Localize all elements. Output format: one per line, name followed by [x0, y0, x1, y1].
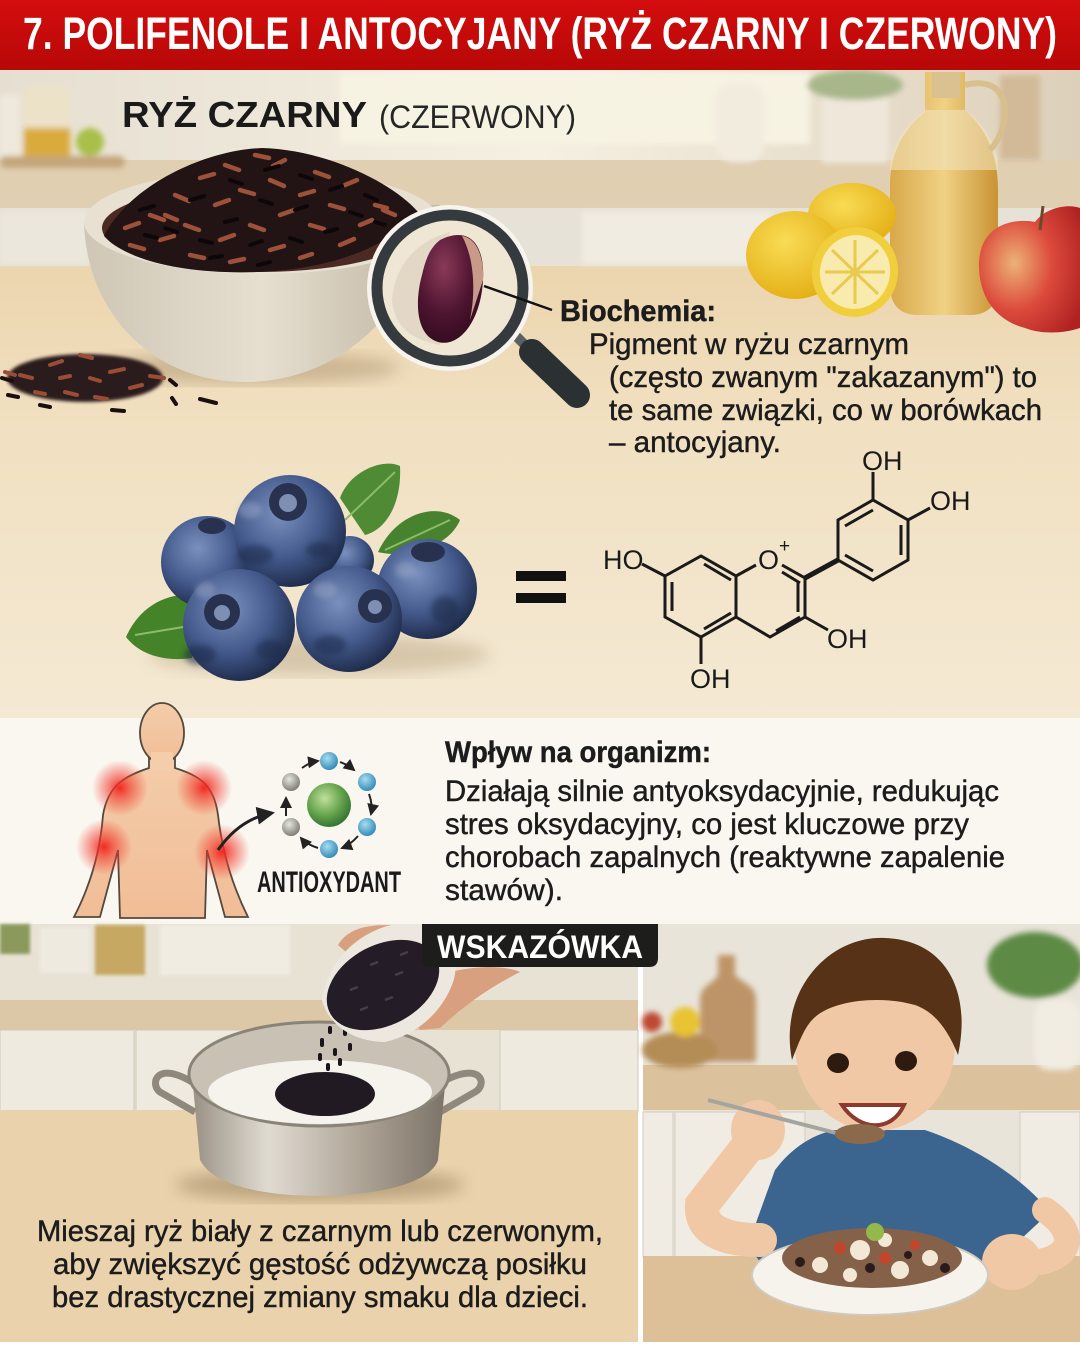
illustration: lemons, oil bottle, apple: [746, 72, 1080, 332]
text block: biochemistry: – antocyjany.: [609, 426, 781, 459]
panel: effect on the body: [0, 703, 1080, 924]
text block: effect on body: chorobach zapalnych (reaktywne zapalenie: [445, 841, 1005, 874]
text block: biochemistry: [560, 295, 1042, 459]
illustration: plate of rice: [752, 1223, 988, 1315]
text block: effect on body: stres oksydacyjny, co jest kluczowe przy: [445, 808, 969, 841]
illustration: hand pouring rice: [311, 922, 520, 1048]
text block: biochemistry: te same związki, co w borówkach: [609, 394, 1042, 427]
heading: rice: (CZERWONY): [379, 99, 576, 135]
chemical structure: anthocyanin: O: [758, 545, 779, 575]
text block: effect on body: Działają silnie antyoksydacyjnie, redukując: [445, 775, 999, 808]
illustration: child: [702, 938, 1067, 1290]
pointer line: [484, 286, 552, 310]
panel: kitchen background: [0, 68, 1080, 718]
text block: tip: [37, 1215, 603, 1314]
illustration: pot with rice: [155, 1022, 481, 1196]
chemical structure: anthocyanin: OH: [690, 664, 730, 694]
text block: effect on body: stawów).: [445, 874, 563, 907]
text block: tip: bez drastycznej zmiany smaku dla dzieci.: [52, 1281, 588, 1314]
equals sign: [516, 571, 566, 603]
illustration: blueberries: [126, 464, 490, 681]
text block: tip: aby zwiększyć gęstość odżywczą posiłku: [53, 1248, 587, 1281]
chemical structure: anthocyanin: OH: [827, 624, 868, 654]
bottom white strip: [0, 1342, 1080, 1350]
text block: biochemistry: (często zwanym "zakazanym") to: [609, 361, 1037, 394]
panel: child eating: [642, 924, 1080, 1342]
illustration: bowl of rice: [84, 148, 440, 384]
illustration: human body with inflammation: [74, 703, 272, 918]
heading: rice: RYŻ CZARNY: [122, 94, 367, 135]
icon: rice grain: [418, 235, 483, 343]
icon: magnifying glass with grain: [367, 205, 577, 395]
panel: cooking tip: [0, 922, 638, 1342]
chemical structure: anthocyanin: OH: [930, 486, 970, 516]
chemical structure: anthocyanin: HO: [603, 545, 644, 575]
chemical structure: anthocyanin: +: [779, 536, 790, 557]
text block: effect on body: Wpływ na organizm:: [445, 736, 711, 769]
chemical structure: anthocyanin: [603, 446, 970, 694]
chemical structure: anthocyanin: OH: [862, 446, 902, 476]
text block: biochemistry: Biochemia:: [560, 295, 716, 328]
label: tip badge: WSKAZÓWKA: [437, 929, 643, 965]
icon: antioxidant molecule: [282, 752, 376, 858]
heading: rice: [122, 94, 576, 135]
illustration: scattered rice: [2, 354, 216, 411]
text block: biochemistry: Pigment w ryżu czarnym: [589, 328, 909, 361]
label: antioxidant: ANTIOXYDANT: [257, 866, 401, 899]
text block: effect on body: [445, 736, 1005, 907]
text block: tip: Mieszaj ryż biały z czarnym lub czerwonym,: [37, 1215, 603, 1248]
